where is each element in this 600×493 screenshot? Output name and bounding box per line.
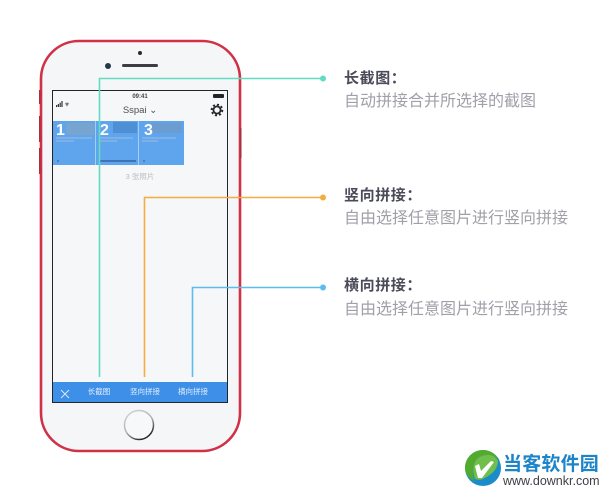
thumbnail 3 [142,122,182,162]
phone body [39,41,242,451]
tool: horizontal stitch: 横向拼接 [178,387,208,396]
number 3: 3 [144,122,153,139]
thumbnail 2 [96,121,139,165]
nav title: Sspai ⌄ [123,105,157,116]
status bar [56,94,224,107]
earpiece, camera and sensor [105,51,158,69]
heading: 竖向拼接： [344,187,422,204]
callout: long screenshot [344,70,536,110]
phone [39,40,242,452]
screen [52,90,228,403]
orange connector [144,194,326,377]
thumbnail 1 [53,121,96,165]
brand name: 当客软件园 [503,454,599,475]
heading: 长截图： [344,70,406,87]
watermark logo [465,450,600,488]
teal connector [100,76,326,377]
number 2: 2 [100,122,109,139]
brand url: www.downkr.com [503,474,600,488]
heading: 横向拼接： [344,277,422,294]
description: 自由选择任意图片进行竖向拼接 [344,301,568,318]
signal icon [56,101,69,107]
battery icon [213,94,224,98]
photo count: 3 张照片 [126,172,154,181]
description: 自动拼接合并所选择的截图 [344,93,536,110]
thumbnails [53,121,184,165]
description: 自由选择任意图片进行竖向拼接 [344,210,568,227]
callout: vertical stitch [344,187,568,227]
home button [124,410,154,440]
tool: long screenshot: 长截图 [88,387,110,396]
icon: settings gear [210,104,224,116]
number 1: 1 [56,122,65,139]
callout: horizontal stitch [344,277,568,318]
bottom toolbar [53,382,227,402]
tool: vertical stitch: 竖向拼接 [130,387,160,396]
icon: logo [465,450,501,486]
blue connector [192,284,326,377]
clock: 09:41 [132,94,148,100]
icon: close [60,390,70,398]
